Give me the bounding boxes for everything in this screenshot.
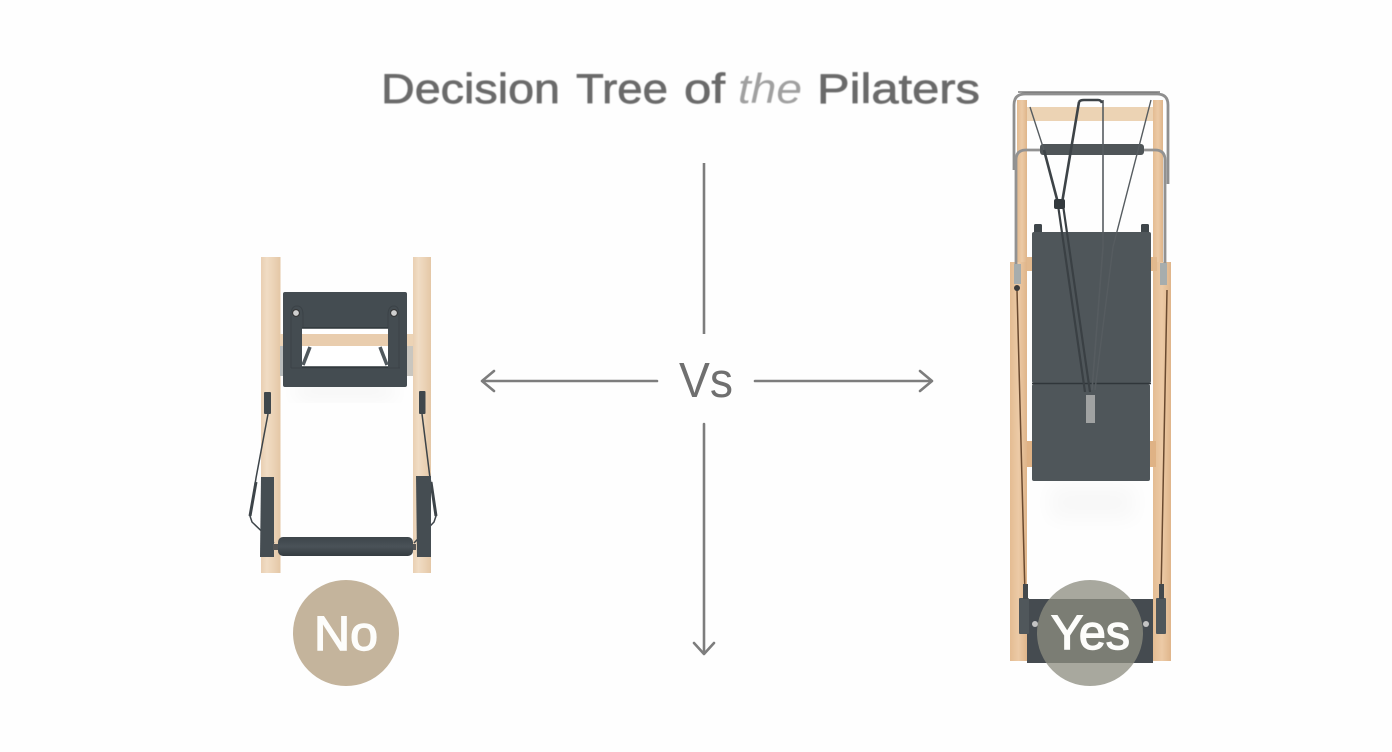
roller: [273, 544, 416, 550]
cords beside carriage: [1017, 290, 1167, 595]
wood frame: [1017, 100, 1027, 270]
left equipment: compact pilates ladder: [250, 257, 436, 573]
arrow: down: [694, 424, 714, 654]
upper carriage pad: [1034, 224, 1042, 234]
metal clamps: [1014, 264, 1021, 284]
title: the: [738, 65, 802, 112]
title: Pilaters: [817, 65, 980, 112]
arrow: up stem: [703, 163, 705, 334]
bolts: [293, 310, 299, 316]
arrow: right to Yes: [755, 371, 932, 391]
clips: [264, 392, 271, 414]
title: Tree: [576, 65, 668, 112]
right equipment: tall pilates reformer: [1010, 92, 1171, 663]
title: [381, 65, 980, 112]
upper pad: [283, 292, 407, 387]
soft shadow under pad: [295, 385, 395, 397]
footbar: [1027, 599, 1153, 663]
No badge: [293, 580, 399, 686]
sleeves: [260, 477, 274, 557]
straps: [1030, 100, 1151, 390]
Vs label: Vs: [679, 354, 733, 408]
Yes badge: Yes: [1051, 607, 1130, 660]
lower carriage pad: [1032, 384, 1150, 481]
wood crossbar behind pad: [280, 334, 413, 346]
No badge: No: [314, 608, 378, 661]
title: of: [684, 65, 725, 112]
pad bolsters: [291, 306, 400, 368]
Yes badge: [1037, 580, 1143, 686]
wood rails: [261, 257, 280, 573]
metal frame: [1014, 94, 1168, 184]
soft shadow: [1050, 485, 1135, 520]
top padded bar: [1040, 144, 1144, 155]
title: Decision: [381, 65, 560, 112]
arrow: left to No: [482, 371, 657, 391]
strap buckle: [1086, 395, 1095, 423]
pad straps: [303, 347, 387, 365]
cords: [250, 414, 274, 543]
